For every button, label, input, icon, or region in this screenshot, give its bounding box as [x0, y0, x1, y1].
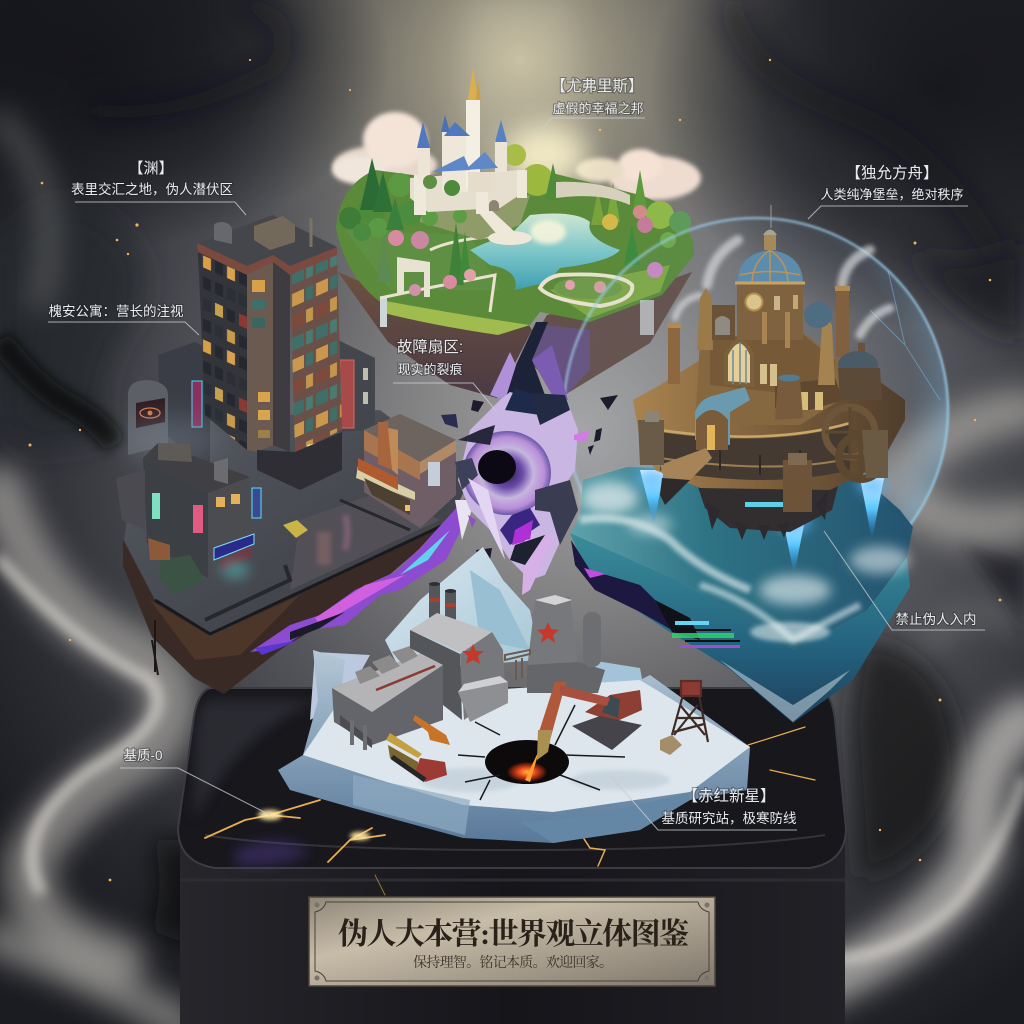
island rock underside	[338, 272, 532, 398]
fog around buildings	[120, 418, 220, 462]
label: Crimson Nova	[610, 775, 797, 830]
label: Abyss	[71, 160, 246, 215]
label: Ark: 人类纯净堡垒，绝对秩序	[820, 187, 964, 202]
taxi	[283, 520, 308, 538]
label: Euphoria	[537, 77, 645, 133]
front arched greenhouse	[695, 387, 750, 445]
thin fissure through island rock	[505, 322, 548, 400]
factory west block	[332, 646, 443, 750]
castle wall terrace	[420, 195, 530, 240]
label: no impostors: 禁止伪人入内	[896, 612, 976, 627]
floating city island: The Abyss	[116, 215, 476, 694]
water tower with eye	[128, 380, 168, 455]
chimneys	[668, 324, 680, 384]
factory main block with star	[410, 582, 508, 722]
crate boxes	[660, 735, 682, 755]
floating island: Euphoria garden	[332, 68, 701, 398]
trees	[339, 144, 691, 296]
thruster flames	[637, 468, 887, 575]
label: no impostors	[824, 531, 985, 630]
side observatory	[804, 302, 832, 328]
crimson nova ice base island	[278, 547, 750, 843]
gold particles	[28, 59, 1001, 881]
label: Huaian apartment: 槐安公寓：营长的注视	[48, 303, 184, 319]
label: Abyss: 【渊】	[128, 160, 174, 177]
excavator	[537, 682, 642, 760]
label: Huaian apartment	[48, 303, 199, 335]
reality crack: fault sector	[441, 322, 618, 595]
balcony	[660, 448, 712, 480]
wet street ground	[124, 410, 470, 636]
floating island: ice and sea	[570, 467, 913, 723]
purple glitch edge	[250, 495, 476, 655]
label: Crimson Nova: 【赤红新星】	[682, 787, 776, 805]
paths	[380, 236, 632, 312]
hull lower	[695, 478, 840, 532]
label: matrix-0: 基质-0	[123, 747, 163, 763]
main apartment tower	[197, 215, 342, 490]
side spires	[697, 288, 713, 350]
corner tenement with neon	[116, 443, 261, 595]
label: fault sector: 故障扇区:	[397, 338, 463, 356]
main deck	[633, 360, 905, 490]
label: Abyss: 表里交汇之地，伪人潜伏区	[71, 181, 233, 197]
label: Euphoria: 【尤弗里斯】	[550, 77, 644, 95]
label: Crimson Nova: 基质研究站，极寒防线	[662, 810, 796, 826]
label: fault sector	[393, 338, 497, 412]
label: fault sector: 现实的裂痕	[397, 362, 463, 377]
label: matrix-0	[120, 747, 270, 815]
dome	[737, 250, 803, 284]
swirling vortex	[463, 431, 551, 515]
truck	[386, 733, 447, 782]
title plaque	[309, 897, 715, 986]
pit and cracks	[458, 705, 625, 800]
art deco cinema	[356, 414, 456, 528]
glitch edge	[571, 540, 672, 630]
mid tier	[696, 330, 845, 425]
bridge	[556, 182, 630, 205]
back buildings	[158, 342, 210, 470]
pedestal	[178, 688, 846, 1024]
lake	[470, 214, 620, 290]
stone arch	[397, 257, 430, 297]
steampunk ark fortress	[633, 205, 905, 575]
floating island: Ark glass dome	[563, 217, 949, 603]
drum and clock	[737, 282, 803, 340]
small crane	[413, 715, 450, 745]
label: Euphoria: 虚假的幸福之邦	[552, 101, 644, 116]
ice slab	[278, 650, 750, 843]
plaque title: 伪人大本营:世界观立体图鉴	[338, 918, 689, 951]
castle	[410, 68, 527, 215]
marble gold cracks	[205, 727, 815, 895]
iceberg mountain	[385, 547, 540, 670]
label: Ark: 【独允方舟】	[845, 164, 939, 182]
plaque subtitle: 保持理智。铭记本质。欢迎回家。	[413, 954, 613, 971]
label: Ark	[808, 164, 968, 219]
broken shards	[441, 395, 618, 560]
waterfalls	[380, 297, 387, 327]
radio derrick tower	[672, 681, 708, 742]
clouds	[332, 112, 701, 200]
crack body	[458, 392, 578, 580]
island earth underside	[123, 510, 465, 694]
gears	[825, 407, 883, 479]
grass top	[336, 170, 694, 325]
obelisk and silo	[505, 595, 605, 693]
smoke plumes	[675, 240, 890, 372]
arched window	[726, 342, 752, 385]
thruster pods	[638, 412, 888, 512]
